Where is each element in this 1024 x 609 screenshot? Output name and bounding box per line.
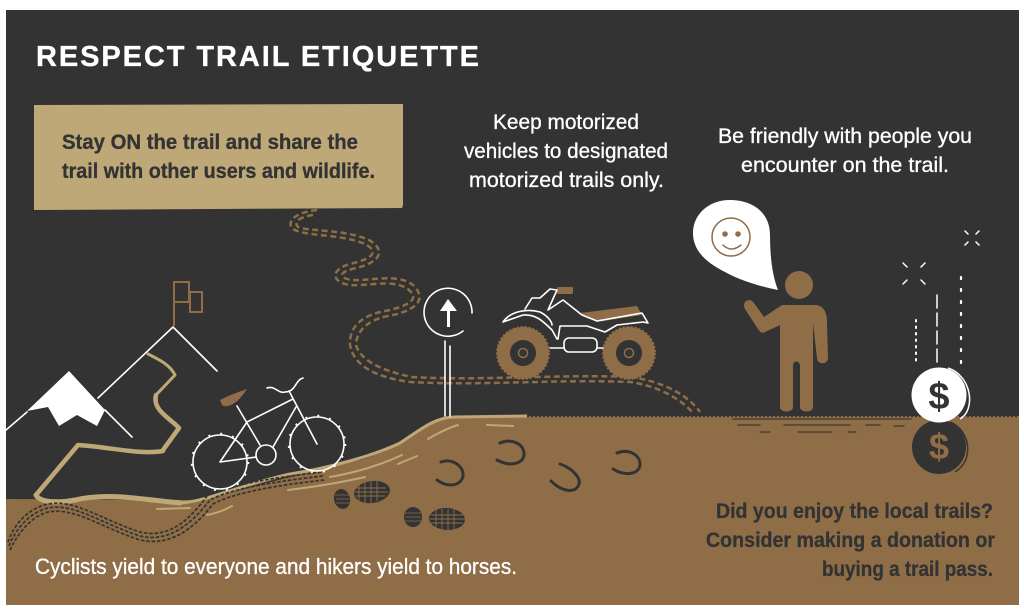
light trail streaks (157, 425, 513, 515)
text: motorized vehicles: motorized trails only. (469, 169, 664, 192)
white coin (912, 368, 970, 422)
text: motorized vehicles: vehicles to designated (464, 140, 668, 163)
text: be friendly: Be friendly with people you (718, 125, 972, 148)
callout: stay on the trail: Stay ON the trail and share the (62, 131, 358, 154)
tan winding trail (36, 354, 527, 503)
dark coin (912, 420, 968, 474)
person waving (744, 271, 828, 412)
callout: stay on the trail: trail with other users and wildlife. (62, 160, 375, 183)
boot prints (332, 479, 466, 531)
falling coin lines and sparkles (903, 231, 979, 365)
speech bubble with smiley (693, 200, 778, 290)
brown ground (6, 416, 1019, 605)
dark tyre tracks (8, 472, 324, 550)
text: donation (706, 500, 995, 581)
icon: flag (174, 282, 202, 326)
text: cyclists yield: Cyclists yield to everyone and hikers yield to horses. (35, 554, 517, 579)
mountains (6, 327, 217, 437)
boot print 1 (332, 479, 391, 511)
icon: saddle (220, 389, 247, 406)
callout: stay on the trail (34, 104, 403, 210)
dark coin: $ (929, 426, 949, 467)
title: RESPECT TRAIL ETIQUETTE (36, 41, 479, 73)
icon: direction sign (424, 288, 472, 416)
ground shadow under person (733, 419, 911, 432)
text: motorized vehicles: Keep motorized (493, 111, 639, 134)
text: donation: Consider making a donation or (706, 529, 995, 552)
text: donation: Did you enjoy the local trails? (716, 500, 993, 523)
horseshoes (437, 441, 640, 490)
text: motorized vehicles (464, 111, 668, 192)
quad bike ATV (497, 287, 655, 379)
text: be friendly: encounter on the trail. (741, 154, 949, 177)
text: donation: buying a trail pass. (822, 558, 993, 581)
white coin: $ (928, 376, 950, 418)
text: be friendly (718, 125, 972, 177)
brown dashed trail (291, 210, 700, 413)
boot print 2 (404, 507, 466, 531)
ground dotted edge (527, 415, 1019, 417)
bicycle (192, 378, 345, 490)
